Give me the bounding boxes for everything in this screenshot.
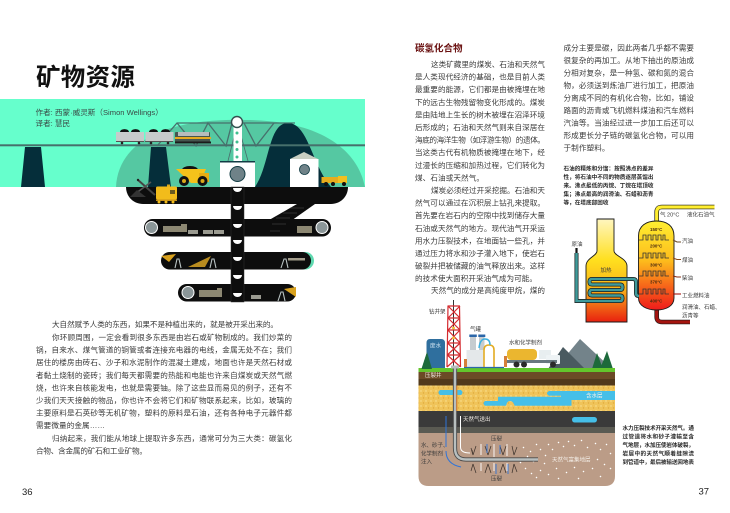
well pipe xyxy=(455,367,538,460)
fracking labels xyxy=(421,308,603,482)
front tree xyxy=(422,352,432,369)
mine carts xyxy=(188,230,261,299)
author credits: 译者: 慧民 xyxy=(36,119,70,128)
title: 矿物资源 xyxy=(36,64,135,92)
temperature labels: 150°C xyxy=(650,227,663,232)
column two text: 物，必须送到炼油厂进行加工，把原油 xyxy=(564,80,694,90)
fracking labels: 压裂井 xyxy=(425,371,442,379)
fracking caption: 岩层中的天然气顺着缝隙流 xyxy=(622,450,694,458)
product labels: 沥青等 xyxy=(682,312,699,320)
page number 37: 37 xyxy=(698,486,709,498)
heading: hydrocarbons: 碳氢化合物 xyxy=(415,42,463,54)
bridge piers xyxy=(21,147,171,187)
fracking caption: 气地层，水加压使岩体破裂， xyxy=(622,441,694,449)
fracking labels: 水和化学制剂 xyxy=(509,338,543,346)
mining machines xyxy=(163,224,312,297)
column one text: 下的远古生物残留物变化形成的。煤炭 xyxy=(415,97,545,107)
product labels: 加热 xyxy=(600,266,612,274)
column two text: 成分主要是碳，因此两者几乎都不需要 xyxy=(564,43,694,53)
product labels: 原油 xyxy=(572,240,583,248)
column one text: 后形成的；石油和天然气则来自深居在 xyxy=(415,122,545,132)
column one text: 煤炭必须经过开采挖掘。石油和天 xyxy=(431,185,545,195)
illustration: surface mine on teal band xyxy=(0,99,365,187)
fracking labels: 化学制剂 xyxy=(421,450,444,458)
intro text block: 烧，也许来自核能发电，也就是需要铀。除了这些显而易见的例子，还有不 xyxy=(36,382,292,392)
refinery caption: 等，在塔底部回收 xyxy=(564,199,609,207)
trees xyxy=(422,351,613,369)
aquifer water xyxy=(438,390,615,406)
column one text xyxy=(415,59,545,295)
refinery caption: 来。沸点最低的丙烷、丁烷在塔顶收 xyxy=(564,181,654,189)
temperature labels: 400°C xyxy=(650,298,663,303)
cutting wheels xyxy=(146,222,328,298)
crude oil coil xyxy=(576,253,639,301)
column two text: 于制作塑料。 xyxy=(564,143,610,153)
fracking caption: 过管道将水和砂子灌输至含 xyxy=(622,432,694,440)
bubble-cap trays xyxy=(639,235,681,294)
column one text: 海底的海洋生物（如浮游生物）的遗体。 xyxy=(415,135,545,145)
mountains xyxy=(555,339,612,369)
intro text block: 者黏土烧制的瓷砖；我们每天都需要的热能和电能也许来自煤炭或天然气燃 xyxy=(36,370,292,380)
intro text block xyxy=(36,319,292,455)
miners with lamps xyxy=(161,254,305,301)
column one text: 过漫长的压缩和加热过程，它们转化为 xyxy=(415,160,545,170)
column one text: 是由陆地上生长的树木被埋在沼泽环境 xyxy=(415,109,545,119)
fracking caption: 到管道中，最后被输送回地表 xyxy=(622,458,694,466)
illustration: underground mine tunnels xyxy=(126,179,348,302)
headframe tower xyxy=(228,116,248,161)
intro text block: 需要微量的金属…… xyxy=(36,420,105,430)
rock layers xyxy=(418,368,615,486)
dark mountain xyxy=(255,123,331,187)
column one text: 通过压力将水和沙子灌入地下，使岩石 xyxy=(415,248,545,258)
refinery caption: 性，将石油中不同的物质逐层蒸馏出 xyxy=(564,173,654,181)
fracking labels: 压裂 xyxy=(491,434,503,442)
fracking labels: 钻井架 xyxy=(429,308,446,316)
intro text block: 少我们天天接触的物品，你也许不会将它们和矿物联系起来，比如，玻璃的 xyxy=(36,395,292,405)
column one text: 石油或天然气的地方。现代油气开采运 xyxy=(415,223,545,233)
intro text block: 你环顾周围，一定会看到很多东西是由岩石或矿物制成的。我们炒菜的 xyxy=(52,332,292,342)
fracking labels: 水、砂子、 xyxy=(421,441,449,449)
fractures xyxy=(471,446,517,473)
product labels: 气 20°C xyxy=(660,210,679,218)
inclined ramp xyxy=(270,204,315,220)
skip buckets xyxy=(233,188,242,297)
column two text: 路面的沥青或飞机燃料煤油和汽车燃料 xyxy=(564,105,694,115)
fracking labels: 天然气富集地层 xyxy=(552,456,591,464)
product labels: 润滑油、石蜡、 xyxy=(682,303,721,311)
small truck xyxy=(322,176,347,186)
product labels: 柴油 xyxy=(682,274,694,282)
locomotive xyxy=(175,132,211,144)
distillation column xyxy=(638,221,674,310)
refinery caption xyxy=(564,164,654,207)
temperature labels: 370°C xyxy=(650,280,663,285)
waste water tank xyxy=(426,339,445,368)
water in arrows xyxy=(446,416,461,467)
temperature labels: 300°C xyxy=(650,262,663,267)
product labels xyxy=(572,210,721,320)
column two text: 形成更长分子链的碳氢化合物，可以用 xyxy=(564,130,694,140)
author credits: 作者: 西蒙·威灵斯（Simon Wellings） xyxy=(36,107,163,117)
fracking labels: 废水 xyxy=(430,342,442,350)
fracking labels: 天然气送出 xyxy=(463,415,491,423)
refinery diagram xyxy=(572,207,721,322)
column two text: 很复杂的再加工。从地下抽出的原油成 xyxy=(564,55,694,65)
author credits xyxy=(36,107,163,128)
page number 36: 36 xyxy=(22,487,33,498)
column one text: 然气可以通过在沉积层上钻孔来提取。 xyxy=(415,198,545,208)
gas out arrow xyxy=(460,416,470,453)
fracking labels: 含水层 xyxy=(586,392,603,400)
column one text: 煤、石油或天然气。 xyxy=(415,172,484,182)
product labels: 煤油 xyxy=(682,256,694,264)
column two text: 分相对复杂，是一种氢、碳和氮的混合 xyxy=(564,68,694,78)
intro text block: 主要原料是石英砂等无机矿物，塑料的原料是石油，还有各种电子元器件都 xyxy=(36,408,292,418)
fracking labels: 注入 xyxy=(421,458,433,466)
gas-rich layer specks xyxy=(520,440,611,479)
winding house xyxy=(220,161,255,187)
temperature labels xyxy=(650,227,663,303)
intro text block: 锅，自来水、煤气管道的铜管或者连接充电器的电线，金属无处不在；我们 xyxy=(36,345,292,355)
coal wagons xyxy=(116,129,174,144)
product labels: 工业燃料油 xyxy=(682,292,710,300)
furnace xyxy=(586,219,627,322)
column one text: 首先要在岩石内的空隙中找到储存大量 xyxy=(415,210,545,220)
intro text block: 归纳起来，我们能从地球上提取许多东西，通常可分为三大类：碳氢化 xyxy=(52,433,292,443)
column two text xyxy=(564,43,694,153)
column one text: 是人类现代经济的基础，也是目前人类 xyxy=(415,72,545,82)
fracking labels: 压裂 xyxy=(491,474,503,482)
intro text block: 大自然赋予人类的东西，如果不是种植出来的，就是被开采出来的。 xyxy=(52,319,278,329)
fracking caption xyxy=(622,424,694,466)
green hill xyxy=(116,120,365,187)
bottom residue pipe xyxy=(657,308,690,322)
railway bridge xyxy=(0,123,365,146)
product labels: 液化石油气 xyxy=(687,210,715,218)
column two text: 分离成不同的有机化合物，比如，铺设 xyxy=(564,93,694,103)
refinery caption: 石油的精炼和分馏：按照沸点的差异 xyxy=(564,164,654,172)
yellow dump truck xyxy=(176,166,209,186)
column one text: 当这类古代有机物质被掩埋在地下，经 xyxy=(415,147,545,157)
flow arrows xyxy=(481,444,507,471)
column one text: 这类矿藏里的煤炭、石油和天然气 xyxy=(431,59,545,69)
product labels: 汽油 xyxy=(682,237,694,245)
fracking labels: 气罐 xyxy=(470,325,482,333)
intro text block: 居住的楼房由砖石、沙子和水泥制作的混凝土建成，地面也许是天然石材或 xyxy=(36,357,292,367)
gas tanks plant xyxy=(464,334,507,368)
column two text: 汽油等。当油经过进一步加工后还可以 xyxy=(564,118,694,128)
column one text: 最重要的能源，它们都是由被掩埋在地 xyxy=(415,84,545,94)
vertical shaft xyxy=(231,187,244,302)
storage building xyxy=(290,152,318,187)
refinery caption: 集；沸点最高的润滑油、石蜡和沥青 xyxy=(564,190,654,198)
column one text: 破裂并把被储藏的油气释放出来。这样 xyxy=(415,261,545,271)
intro text block: 合物、含金属的矿石和工业矿物。 xyxy=(36,445,147,455)
water and chemical truck xyxy=(507,349,560,368)
column one text: 的技术使大面积开采油气成为可能。 xyxy=(415,273,537,283)
column one text: 天然气的成分是高纯度甲烷，煤的 xyxy=(431,285,545,295)
top vapour pipe xyxy=(657,207,714,224)
fracking cross-section xyxy=(418,300,615,486)
temperature labels: 200°C xyxy=(650,243,663,248)
fracking caption: 水力压裂技术开采天然气。通 xyxy=(622,424,694,432)
drilling rig xyxy=(447,300,460,368)
excavator xyxy=(130,179,177,204)
column one text: 用水力压裂技术，在地面钻一些孔，并 xyxy=(415,235,545,245)
